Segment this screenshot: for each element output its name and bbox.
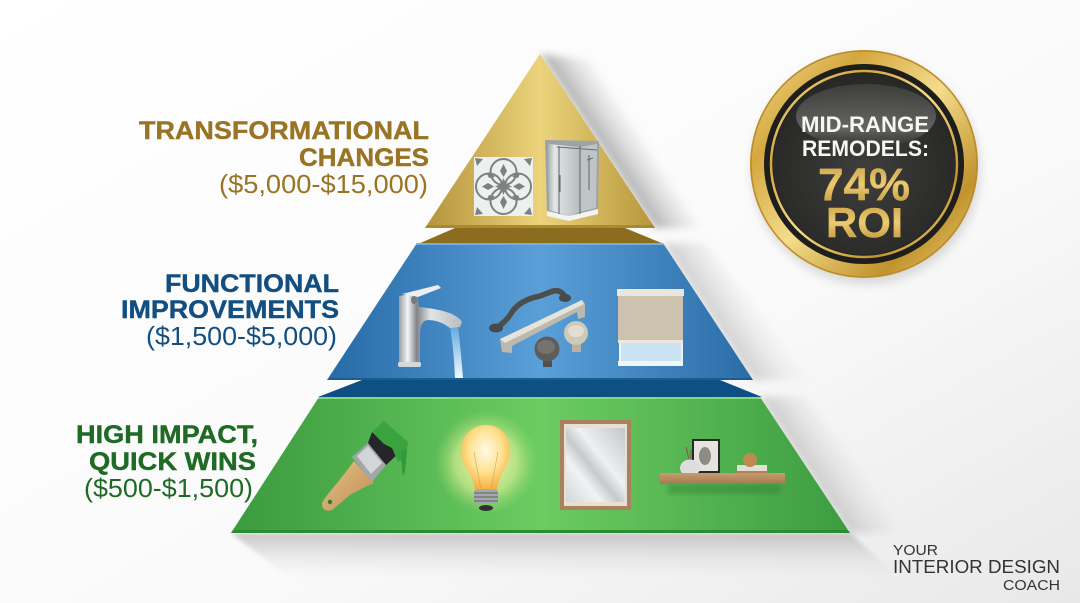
icon: patterned tile (474, 157, 533, 216)
badge: mid-range remodels 74% ROI (750, 50, 980, 284)
icon: glass shower enclosure (545, 140, 599, 221)
tier: functional improvements (blue) (318, 243, 762, 397)
label: functional improvements (121, 270, 339, 351)
logo: your interior design coach: COACH (1003, 578, 1060, 594)
icon: paint brush (322, 421, 408, 511)
icon: cabinet pulls and knobs (489, 291, 588, 367)
label: functional improvements: IMPROVEMENTS (121, 296, 339, 324)
badge: mid-range remodels 74% ROI: MID-RANGE (801, 112, 929, 137)
label: high impact quick wins: QUICK WINS (89, 448, 256, 476)
label: functional improvements: ($1,500-$5,000) (146, 323, 337, 351)
icon: glowing light bulb (434, 410, 538, 514)
icon: floating shelf with decor (660, 439, 785, 494)
label: high impact quick wins: HIGH IMPACT, (76, 421, 258, 449)
logo: your interior design coach: YOUR (893, 543, 938, 559)
logo: your interior design coach (893, 543, 1060, 594)
tier: high impact quick wins (green) (231, 397, 850, 533)
icon: chrome faucet with water (398, 285, 463, 378)
label: transformational changes: CHANGES (299, 144, 429, 172)
label: functional improvements: FUNCTIONAL (165, 270, 339, 298)
label: transformational changes: ($5,000-$15,000) (219, 171, 428, 199)
badge: mid-range remodels 74% ROI: 74% (818, 159, 910, 210)
icon: framed mirror (560, 420, 631, 510)
label: high impact quick wins (76, 421, 258, 503)
badge: mid-range remodels 74% ROI: ROI (826, 199, 903, 246)
logo: your interior design coach: INTERIOR DESIGN (893, 556, 1060, 577)
badge: mid-range remodels 74% ROI: REMODELS: (802, 136, 929, 161)
tier: transformational changes (gold) (418, 54, 664, 244)
pyramid (231, 54, 850, 533)
pyramid cast shadows (231, 54, 910, 578)
label: transformational changes: TRANSFORMATIONAL (139, 117, 429, 145)
label: high impact quick wins: ($500-$1,500) (84, 475, 253, 503)
icon: roller blind window (617, 289, 684, 366)
label: transformational changes (139, 117, 429, 199)
